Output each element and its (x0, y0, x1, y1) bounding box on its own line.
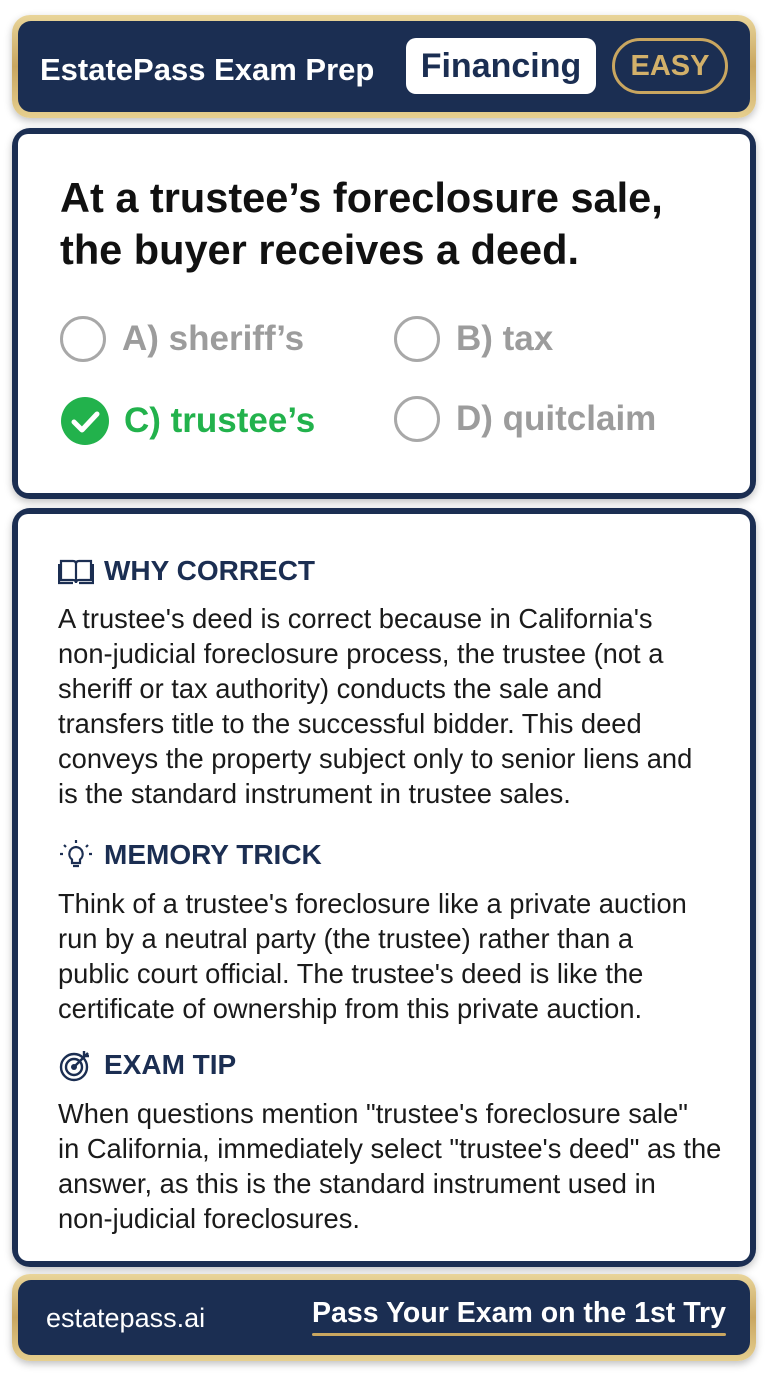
text: why correct: non-judicial foreclosure process, the trustee (not a (58, 638, 663, 669)
text: memory trick: public court official. The trustee's deed is like the (58, 958, 643, 989)
text: memory trick: certificate of ownership from this private auction. (58, 993, 642, 1024)
text: why correct (58, 603, 692, 809)
text: memory trick (58, 888, 687, 1024)
text: exam tip: in California, immediately select "trustee's deed" as the (58, 1133, 721, 1164)
text: exam tip: non-judicial foreclosures. (58, 1203, 360, 1234)
text: exam tip: answer, as this is the standard instrument used in (58, 1168, 656, 1199)
explanation card (12, 508, 756, 1267)
option B (394, 316, 553, 362)
heading: memory trick: MEMORY TRICK (104, 839, 322, 870)
question text: At a trustee’s foreclosure sale, (60, 174, 663, 221)
header bar (12, 15, 756, 118)
brand title: EstatePass Exam Prep (40, 52, 374, 87)
text: exam tip (58, 1098, 721, 1234)
text: why correct: transfers title to the successful bidder. This deed (58, 708, 642, 739)
heading: why correct: WHY CORRECT (104, 555, 315, 586)
footer url: estatepass.ai (46, 1303, 205, 1333)
question text (60, 174, 663, 273)
option A (60, 316, 304, 362)
option D (394, 396, 656, 442)
category badge: Financing (421, 47, 581, 85)
option C correct (61, 397, 315, 445)
option D: D) quitclaim (456, 399, 656, 438)
footer bar (12, 1274, 756, 1361)
text: memory trick: run by a neutral party (the trustee) rather than a (58, 923, 633, 954)
option A: A) sheriff’s (122, 319, 304, 358)
text: memory trick: Think of a trustee's foreclosure like a private auction (58, 888, 687, 919)
option C correct: C) trustee’s (124, 401, 315, 440)
heading: exam tip: EXAM TIP (104, 1049, 236, 1080)
text: why correct: conveys the property subject only to senior liens and (58, 743, 692, 774)
text: exam tip: When questions mention "trustee's foreclosure sale" (58, 1098, 688, 1129)
footer slogan: Pass Your Exam on the 1st Try (312, 1297, 726, 1329)
text: why correct: A trustee's deed is correct because in California's (58, 603, 653, 634)
text: why correct: is the standard instrument in trustee sales. (58, 778, 571, 809)
difficulty badge (612, 38, 728, 94)
option B: B) tax (456, 319, 553, 358)
question card (12, 128, 756, 499)
text: why correct: sheriff or tax authority) conducts the sale and (58, 673, 602, 704)
question text: the buyer receives a deed. (60, 226, 579, 273)
difficulty badge: EASY (630, 50, 709, 82)
category badge (406, 38, 596, 94)
